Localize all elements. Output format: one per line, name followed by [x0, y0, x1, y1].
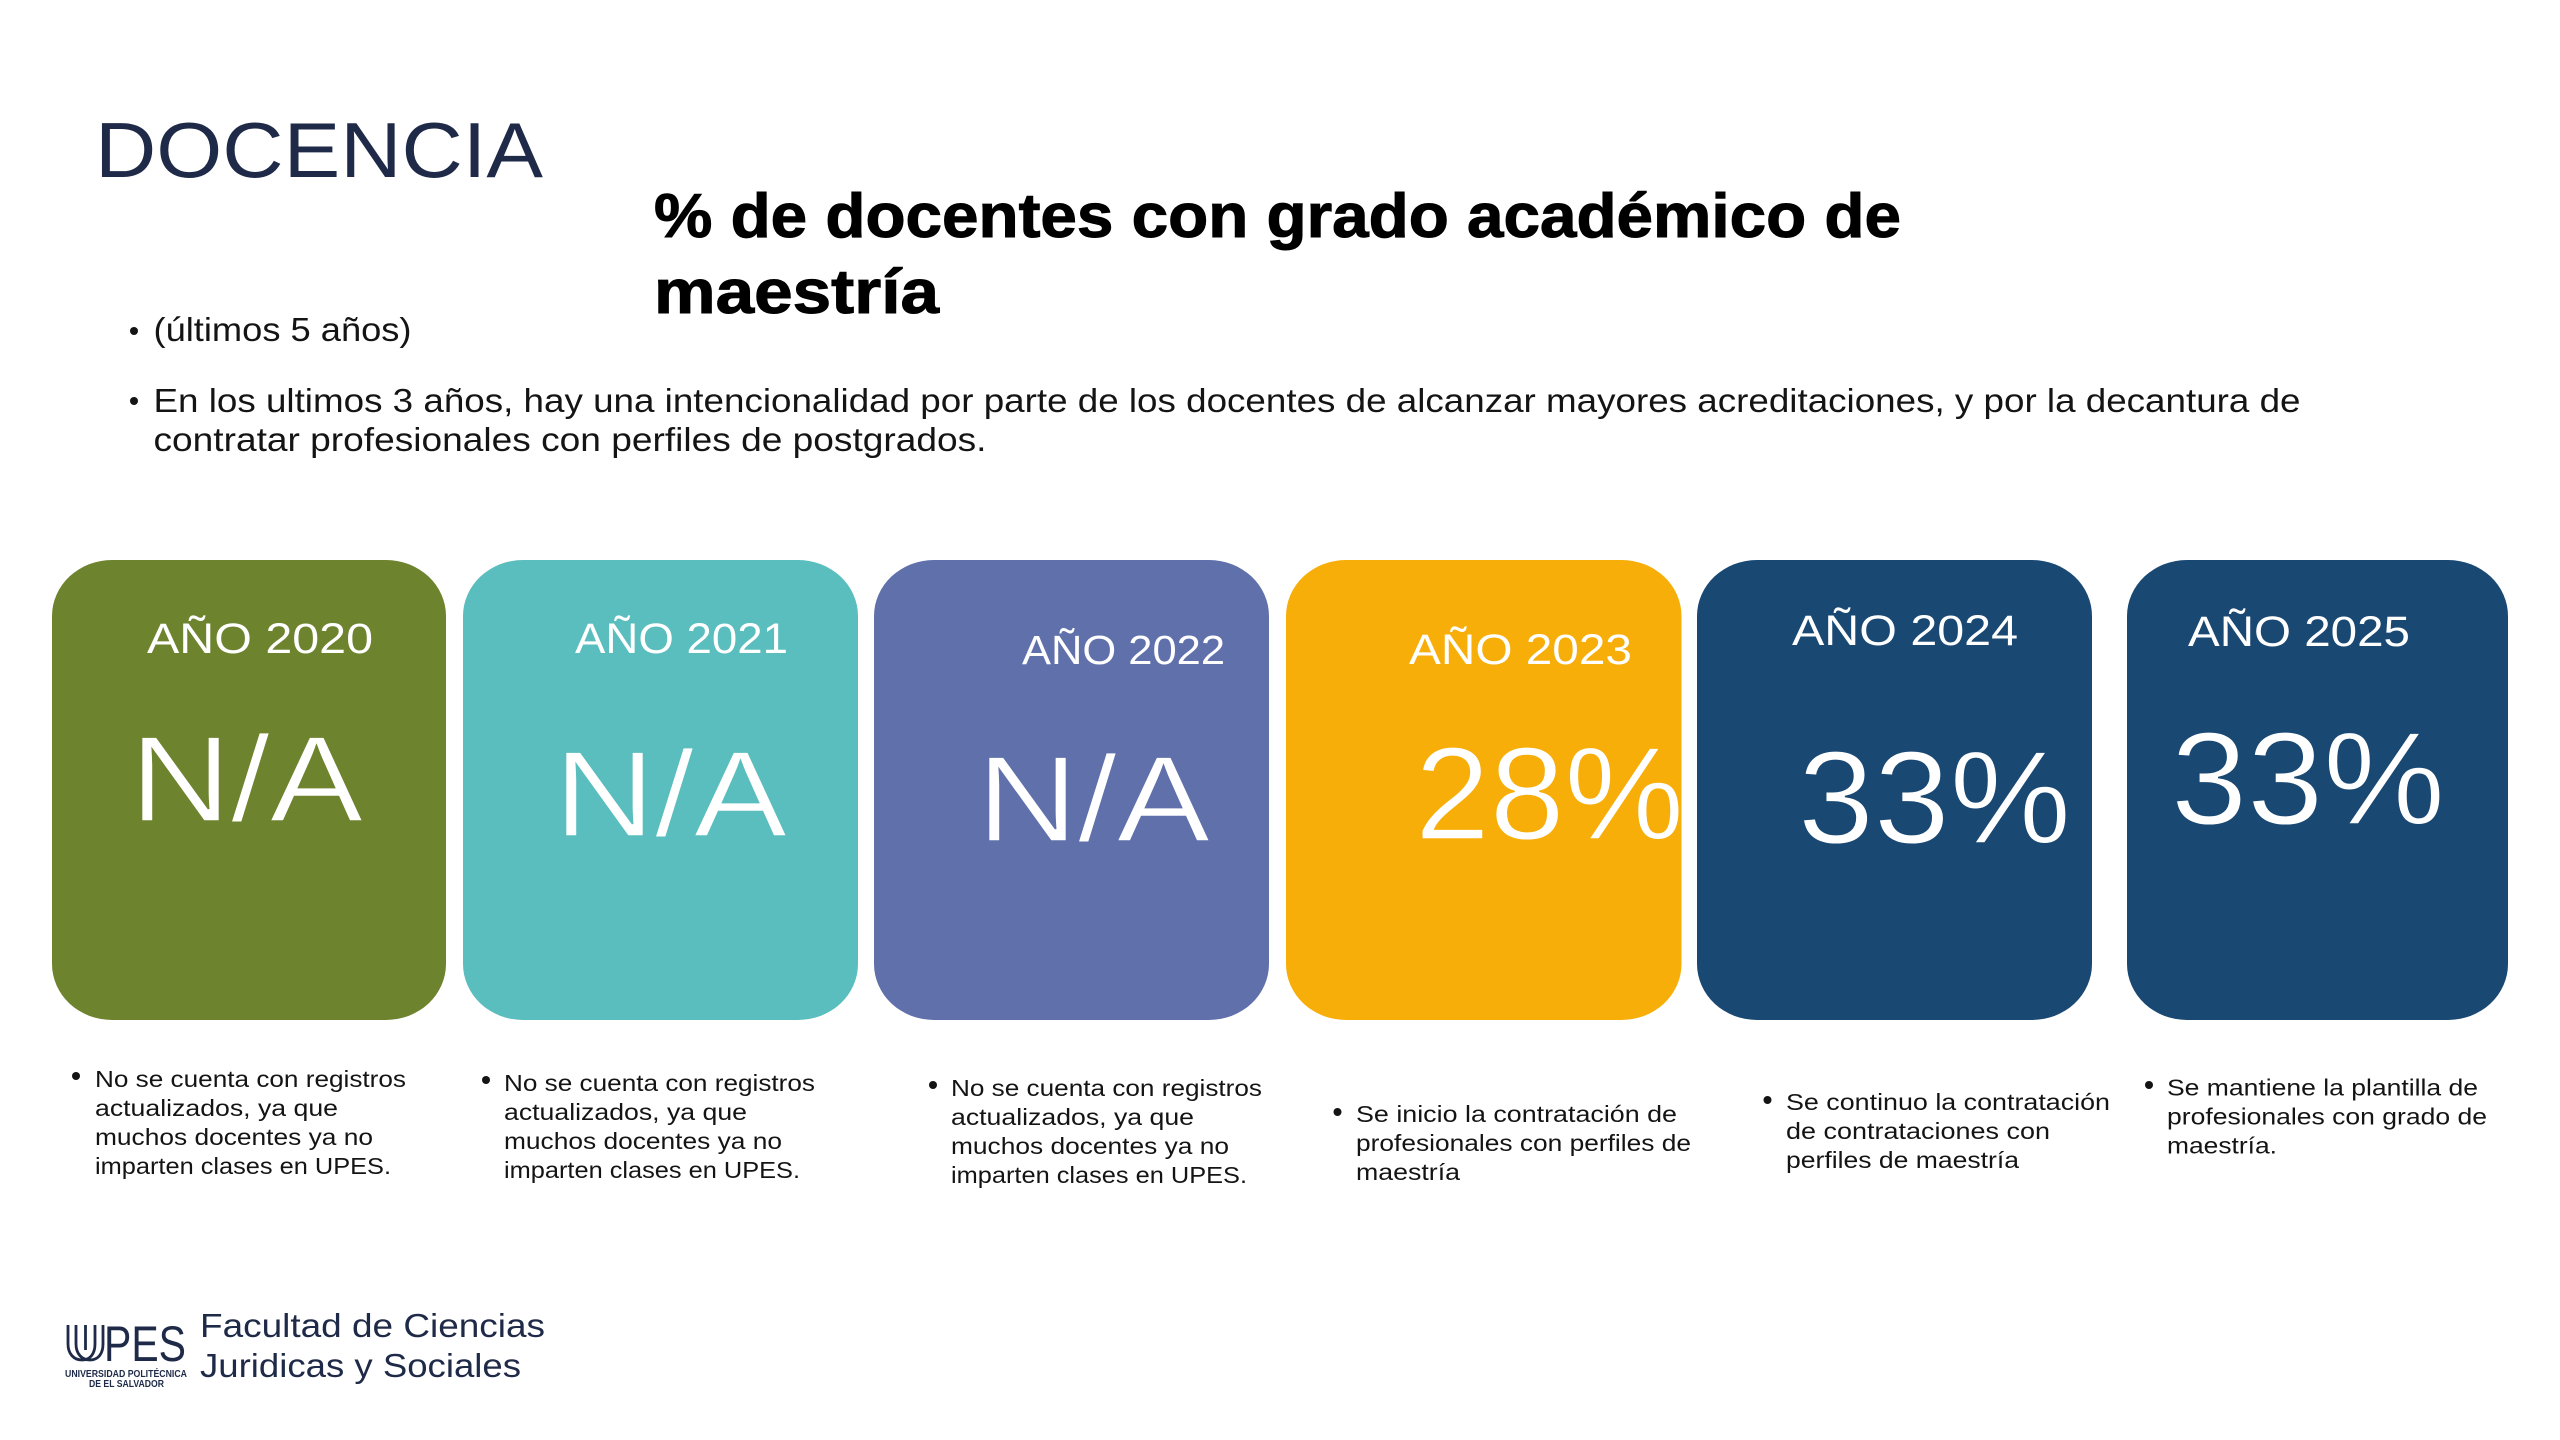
note: 2023: profesionales con perfiles de	[1356, 1130, 1691, 1156]
note: 2021: actualizados, ya que	[504, 1099, 747, 1125]
note: 2020	[72, 1066, 406, 1179]
heading: indicator title: maestría	[654, 258, 940, 327]
panel: año 2024: 33%	[1798, 724, 2071, 871]
panel: año 2022	[874, 560, 1269, 1020]
note: 2022	[929, 1075, 1262, 1188]
panel: año 2024: AÑO 2024	[1792, 607, 2018, 655]
note: 2020: muchos docentes ya no	[95, 1124, 373, 1150]
heading: indicator title	[654, 182, 1901, 327]
text block: intro bullets	[130, 311, 2300, 458]
panel: año 2024	[1697, 560, 2092, 1020]
panel: año 2023: 28%	[1415, 720, 1684, 867]
panel: año 2025: AÑO 2025	[2188, 608, 2410, 656]
note: 2025	[2145, 1074, 2487, 1158]
note: 2022: actualizados, ya que	[951, 1104, 1194, 1130]
note: 2020: imparten clases en UPES.	[95, 1153, 391, 1179]
logo: UPES	[65, 1316, 187, 1390]
panel: año 2021: N/A	[554, 726, 788, 862]
note: 2022: No se cuenta con registros	[951, 1075, 1262, 1101]
text block: intro bullets: En los ultimos 3 años, hay una intencionalidad por parte de los docentes de alcanzar mayores acreditaciones, y por la decantura de	[154, 382, 2300, 419]
note: 2023: Se inicio la contratación de	[1356, 1101, 1677, 1127]
note: 2021: No se cuenta con registros	[504, 1070, 815, 1096]
footer: faculty name: Juridicas y Sociales	[200, 1347, 521, 1384]
panel: año 2020	[52, 560, 446, 1020]
note: 2023	[1334, 1101, 1691, 1185]
logo: UPES: PES	[104, 1316, 186, 1372]
panel: año 2022: N/A	[977, 731, 1211, 867]
panel: año 2023: AÑO 2023	[1409, 626, 1632, 674]
text block: intro bullets: (últimos 5 años)	[154, 311, 412, 348]
note: 2020: actualizados, ya que	[95, 1095, 338, 1121]
logo: UPES: DE EL SALVADOR	[89, 1378, 164, 1390]
note: 2024: perfiles de maestría	[1786, 1147, 2019, 1173]
heading: indicator title: % de docentes con grado académico de	[654, 182, 1901, 251]
note: 2025: profesionales con grado de	[2167, 1104, 2487, 1130]
note: 2024: de contrataciones con	[1786, 1118, 2050, 1144]
note: 2025: Se mantiene la plantilla de	[2167, 1074, 2478, 1100]
footer: faculty name: Facultad de Ciencias	[200, 1307, 545, 1344]
note: 2021: imparten clases en UPES.	[504, 1157, 800, 1183]
panel: año 2022: AÑO 2022	[1022, 627, 1225, 673]
panel: año 2020: N/A	[130, 711, 364, 847]
panel: año 2025: 33%	[2171, 705, 2445, 852]
note: 2024	[1764, 1089, 2110, 1173]
panel: año 2021: AÑO 2021	[575, 615, 788, 663]
panel: año 2021	[463, 560, 858, 1020]
note: 2022: imparten clases en UPES.	[951, 1162, 1247, 1188]
text block: intro bullets: contratar profesionales con perfiles de postgrados.	[154, 421, 986, 458]
panel: año 2023	[1286, 560, 1684, 1020]
note: 2021	[482, 1070, 815, 1183]
note: 2021: muchos docentes ya no	[504, 1128, 782, 1154]
note: 2023: maestría	[1356, 1159, 1460, 1185]
note: 2025: maestría.	[2167, 1132, 2277, 1158]
title: DOCENCIA: DOCENCIA	[95, 106, 543, 194]
panel: año 2020: AÑO 2020	[147, 615, 373, 663]
footer: faculty name	[200, 1307, 545, 1384]
note: 2020: No se cuenta con registros	[95, 1066, 406, 1092]
note: 2024: Se continuo la contratación	[1786, 1089, 2110, 1115]
note: 2022: muchos docentes ya no	[951, 1133, 1229, 1159]
logo: UPES: UNIVERSIDAD POLITÉCNICA	[65, 1367, 187, 1380]
panel: año 2025	[2127, 560, 2508, 1020]
